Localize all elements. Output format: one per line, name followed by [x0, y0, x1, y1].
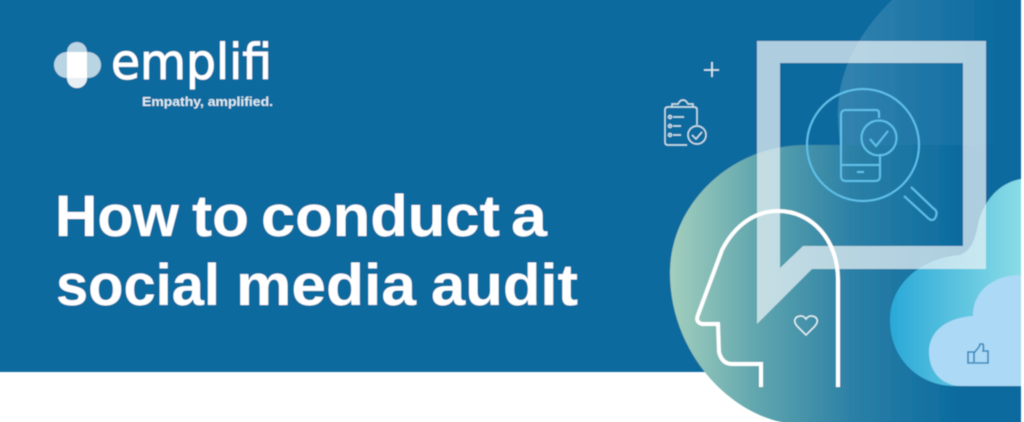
pale top-right blob	[837, 0, 974, 146]
title: media	[236, 253, 417, 318]
logo: emplifi	[54, 34, 273, 109]
icon: heart	[795, 316, 817, 335]
icon: head profile	[697, 211, 838, 387]
icon: magnifier over phone	[807, 89, 937, 220]
title: audit	[431, 253, 578, 318]
icon: thumbs up	[968, 344, 988, 363]
logo mark cross	[54, 42, 101, 88]
cyan cloud	[890, 179, 1021, 386]
title: a	[511, 184, 548, 249]
title	[55, 184, 578, 318]
icon: clipboard checklist	[665, 100, 706, 145]
icon: plus	[704, 62, 719, 77]
logo tagline: Empathy, amplified.	[142, 94, 273, 109]
title: to	[192, 184, 249, 249]
green gradient blob	[670, 145, 1021, 422]
speech bubble outline	[757, 41, 986, 324]
light blue cloud	[929, 275, 1021, 386]
title: social	[56, 253, 220, 318]
title: conduct	[261, 184, 500, 249]
title: How	[55, 184, 180, 249]
logo wordmark: emplifi	[111, 34, 272, 91]
